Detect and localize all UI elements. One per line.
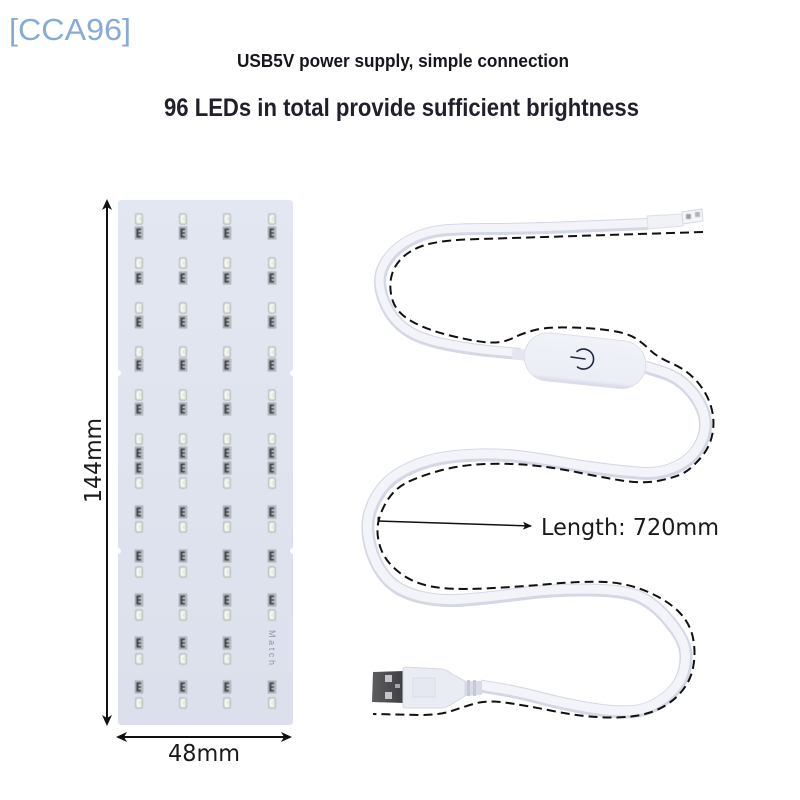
LED column 2 [179, 214, 187, 708]
panel: LED circuit board [118, 200, 293, 725]
model code: [CCA96] [9, 12, 131, 47]
cable: lower section [367, 366, 706, 712]
arrow: cable length pointer [378, 517, 531, 526]
label: 144mm: 144mm [79, 418, 107, 503]
USB metal shell [372, 671, 404, 703]
LED column 1 [135, 214, 143, 708]
arrow: board width [116, 732, 292, 742]
label: 48mm: 48mm [168, 739, 240, 767]
LED column 3 [223, 214, 231, 708]
icon: power symbol [571, 349, 594, 369]
dashed outline: cable length [373, 232, 713, 718]
arrow: board height [102, 199, 112, 726]
board silkscreen mark: Match [267, 630, 277, 665]
LED column 4 [268, 214, 276, 708]
inline touch switch [511, 330, 648, 391]
USB housing [403, 667, 482, 708]
label: cable length: Length: 720mm [541, 513, 719, 541]
USB plug [372, 667, 482, 708]
heading: 96 LEDs in total provide sufficient brightness [164, 94, 639, 122]
subtitle: USB5V power supply, simple connection [237, 50, 569, 71]
connector plug [647, 209, 703, 229]
cable: upper section [380, 223, 648, 354]
